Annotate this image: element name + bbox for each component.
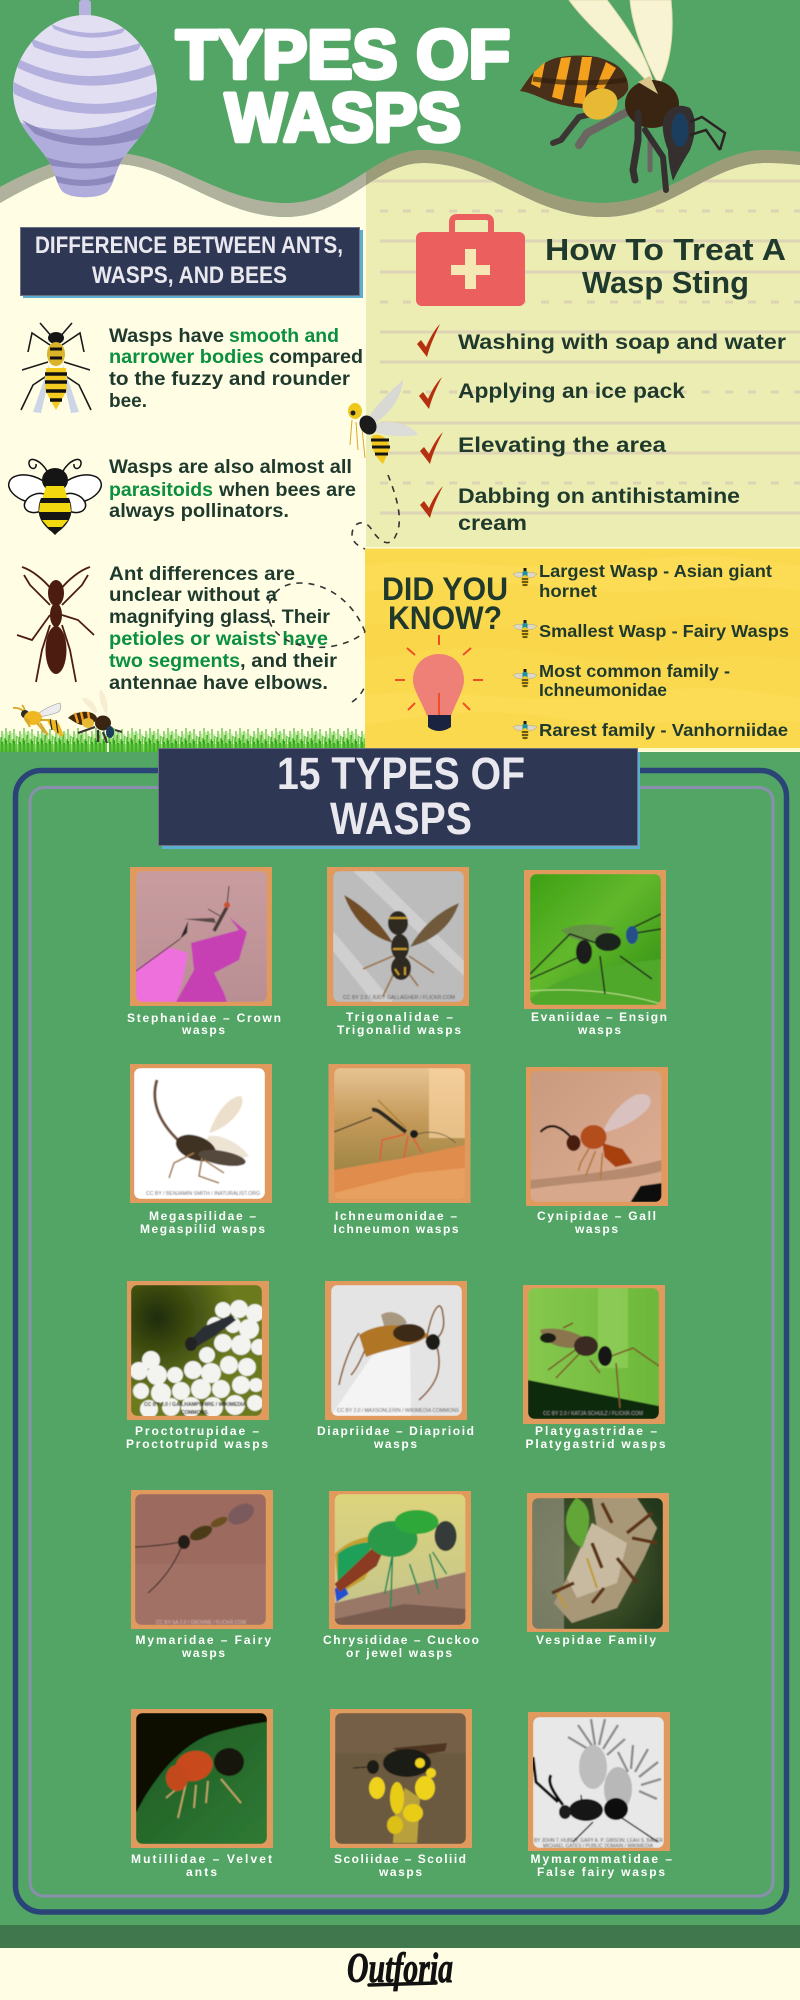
check 2	[419, 377, 442, 409]
card 2: Trigonalidae	[327, 867, 469, 1037]
icon: striped wasp	[21, 323, 91, 413]
check 4	[420, 486, 443, 518]
title: WASPS	[225, 79, 461, 156]
card 3: Evaniidae: wasps	[577, 1023, 621, 1037]
heading: 15 types of wasps: WASPS	[330, 793, 472, 844]
card 4: Megaspilidae: Megaspilid wasps	[140, 1222, 265, 1236]
text: wasp difference	[109, 325, 363, 412]
icon: tiny bee 1	[513, 568, 537, 587]
card 7: Proctotrupidae: CC BY 2.0 / GAILHAMPSHIRE / WIKIMEDIA	[144, 1402, 246, 1408]
card 4: Megaspilidae: Megaspilidae –	[149, 1209, 256, 1223]
card 9: Platygastridae: Platygastrid wasps	[526, 1437, 666, 1451]
heading: 15 types of wasps: 15 TYPES OF	[277, 748, 525, 799]
card 14: Scoliidae: Scoliidae – Scoliid	[334, 1852, 466, 1866]
text: ant difference: magnifying glass. Their	[109, 606, 330, 628]
text: ant difference: Ant differences are	[109, 563, 295, 585]
card 5: Ichneumonidae: Ichneumonidae –	[335, 1209, 457, 1223]
card 7: Proctotrupidae: Proctotrupidae –	[135, 1424, 259, 1438]
text: parasitoids: when bees are	[218, 479, 356, 501]
card 8: Diapriidae: CC BY 2.0 / MAXSONLERIN / WIKIMEDIA COMMONS	[337, 1408, 459, 1414]
text: parasitoids: parasitoids	[109, 479, 213, 501]
fact: smallest: Smallest Wasp - Fairy Wasps	[539, 621, 789, 641]
icon: tiny bee 4	[513, 721, 537, 740]
text: wasp difference: Wasps have	[109, 325, 224, 347]
card 5: Ichneumonidae	[328, 1064, 470, 1236]
panel: frames for wasp gallery	[16, 770, 786, 1912]
card 13: Mutillidae	[131, 1709, 273, 1879]
icon: light bulb	[395, 635, 483, 731]
icon: large bee	[520, 0, 725, 190]
step 4	[458, 485, 740, 535]
card 4: Megaspilidae	[130, 1064, 272, 1236]
card 9: Platygastridae	[523, 1285, 666, 1451]
card 8: Diapriidae	[317, 1281, 474, 1451]
card 15: Mymarommatidae: MICHAEL GATES / PUBLIC DOMAIN / WIKIMEDIA	[543, 1844, 653, 1850]
heading: did you know	[382, 571, 508, 636]
card 15: Mymarommatidae: Mymarommatidae –	[530, 1852, 672, 1866]
card 6: Cynipidae: wasps	[574, 1222, 618, 1236]
text: ant difference: petioles or waists have	[109, 628, 328, 650]
card 9: Platygastridae: CC BY 2.0 / KATJA SCHULZ / FLICKR.COM	[543, 1411, 643, 1417]
fact: largest	[539, 561, 772, 601]
heading: how to treat: Wasp Sting	[582, 265, 749, 300]
card 11: Chrysididae: Chrysididae – Cuckoo	[323, 1633, 479, 1647]
text: parasitoids	[109, 456, 356, 522]
icon: flying wasp	[348, 380, 418, 464]
footer	[0, 1946, 800, 2000]
card 9: Platygastridae: Platygastridae –	[535, 1424, 657, 1438]
check 3	[420, 432, 443, 464]
notebook lines	[366, 181, 800, 513]
card 8: Diapriidae: wasps	[373, 1437, 417, 1451]
check 1	[417, 324, 440, 357]
card 6: Cynipidae	[526, 1067, 668, 1236]
icon: bumble bee	[5, 459, 105, 535]
card 10: Mymaridae	[131, 1490, 273, 1660]
heading: did you know: DID YOU	[382, 571, 508, 607]
text: ant difference: antennae have elbows.	[109, 672, 328, 694]
panel: did you know	[365, 547, 800, 751]
icon: tiny bee 3	[513, 669, 537, 688]
fact: largest: hornet	[539, 581, 597, 601]
footer band	[0, 1925, 800, 1948]
fact: common	[539, 661, 730, 700]
icon: first aid kit	[416, 217, 525, 306]
icon: small yellow wasp	[13, 703, 63, 737]
card 3: Evaniidae	[524, 870, 667, 1037]
card 1: Stephanidae: Stephanidae – Crown	[127, 1011, 281, 1025]
title: TYPES OF	[176, 16, 510, 93]
list: treatment steps	[417, 324, 786, 535]
text: ant difference	[109, 563, 337, 694]
text: wasp difference: compared	[269, 346, 363, 368]
card 15: Mymarommatidae: BY JOHN T. HUBER; GARY A. P. GIBSON; LEAH S. BAUER	[534, 1838, 663, 1844]
fact: common: Most common family -	[539, 661, 730, 681]
panel: right treatment background	[366, 140, 800, 548]
heading: how to treat	[545, 232, 786, 300]
card 5: Ichneumonidae: Ichneumon wasps	[334, 1222, 459, 1236]
card 1: Stephanidae: wasps	[181, 1023, 225, 1037]
text: ant difference: , and their	[240, 650, 337, 672]
fact: common: Ichneumonidae	[539, 680, 667, 700]
card 4: Megaspilidae: CC BY / BENJAMIN SMITH / INATURALIST.ORG	[146, 1191, 260, 1197]
icon: paper wasp nest	[13, 0, 157, 198]
card 14: Scoliidae: wasps	[378, 1865, 422, 1879]
text: ant difference: two segments	[109, 650, 240, 672]
card 10: Mymaridae: CC BY-SA 2.0 / GBOHNE / FLICKR.COM	[156, 1620, 246, 1626]
heading: difference box: DIFFERENCE BETWEEN ANTS,	[35, 232, 343, 259]
card 13: Mutillidae: ants	[186, 1865, 217, 1879]
card 7: Proctotrupidae: COMMONS.	[181, 1410, 209, 1416]
card 12: Vespidae	[527, 1493, 669, 1647]
text: ant difference: unclear without a	[109, 584, 277, 606]
arrow: dashed flight path	[268, 475, 399, 702]
fact: largest: Largest Wasp - Asian giant	[539, 561, 772, 581]
heading: 15 types of wasps	[158, 748, 640, 849]
icon: tiny bee 2	[513, 620, 537, 639]
card 13: Mutillidae: Mutillidae – Velvet	[131, 1852, 272, 1866]
step 2: Applying an ice pack	[458, 380, 685, 403]
heading: difference box: WASPS, AND BEES	[92, 262, 287, 289]
icon: ant	[17, 567, 94, 682]
logo: Outforia: Outforia	[347, 1946, 453, 1992]
card 6: Cynipidae: Cynipidae – Gall	[537, 1209, 656, 1223]
step 4: Dabbing on antihistamine	[458, 485, 740, 508]
wave band	[0, 150, 800, 217]
card 11: Chrysididae	[323, 1491, 479, 1660]
heading: did you know: KNOW?	[388, 600, 502, 636]
step 1: Washing with soap and water	[458, 331, 786, 354]
title	[176, 16, 510, 156]
card 14: Scoliidae	[330, 1709, 472, 1879]
text: wasp difference: smooth and	[229, 325, 339, 347]
card 10: Mymaridae: wasps	[181, 1646, 225, 1660]
heading: how to treat: How To Treat A	[545, 232, 786, 267]
card 11: Chrysididae: or jewel wasps	[346, 1646, 452, 1660]
card 15: Mymarommatidae	[528, 1712, 672, 1879]
card 7: Proctotrupidae: Proctotrupid wasps	[126, 1437, 268, 1451]
card 2: Trigonalidae: Trigonalid wasps	[337, 1023, 461, 1037]
text: wasp difference: bee.	[109, 390, 147, 412]
card 10: Mymaridae: Mymaridae – Fairy	[136, 1633, 271, 1647]
fact: rarest: Rarest family - Vanhorniidae	[539, 720, 788, 740]
card 15: Mymarommatidae: False fairy wasps	[537, 1865, 665, 1879]
text: parasitoids: Wasps are also almost all	[109, 456, 352, 478]
card 8: Diapriidae: Diapriidae – Diaprioid	[317, 1424, 474, 1438]
text: wasp difference: to the fuzzy and rounder	[109, 368, 350, 390]
step 3: Elevating the area	[458, 434, 666, 457]
card 2: Trigonalidae: CC BY 2.0 / JUDY GALLAGHER / FLICKR.COM	[343, 995, 455, 1001]
text: parasitoids: always pollinators.	[109, 500, 289, 522]
grass	[0, 725, 365, 752]
card 7: Proctotrupidae	[126, 1281, 269, 1451]
step 4: cream	[458, 512, 527, 535]
card 2: Trigonalidae: Trigonalidae –	[346, 1010, 453, 1024]
text: wasp difference: narrower bodies	[109, 346, 264, 368]
card 1: Stephanidae	[127, 867, 281, 1037]
icon: small bee	[68, 689, 122, 743]
card 12: Vespidae: Vespidae Family	[536, 1633, 656, 1647]
card 3: Evaniidae: Evaniidae – Ensign	[531, 1010, 667, 1024]
heading: difference box	[20, 228, 363, 298]
